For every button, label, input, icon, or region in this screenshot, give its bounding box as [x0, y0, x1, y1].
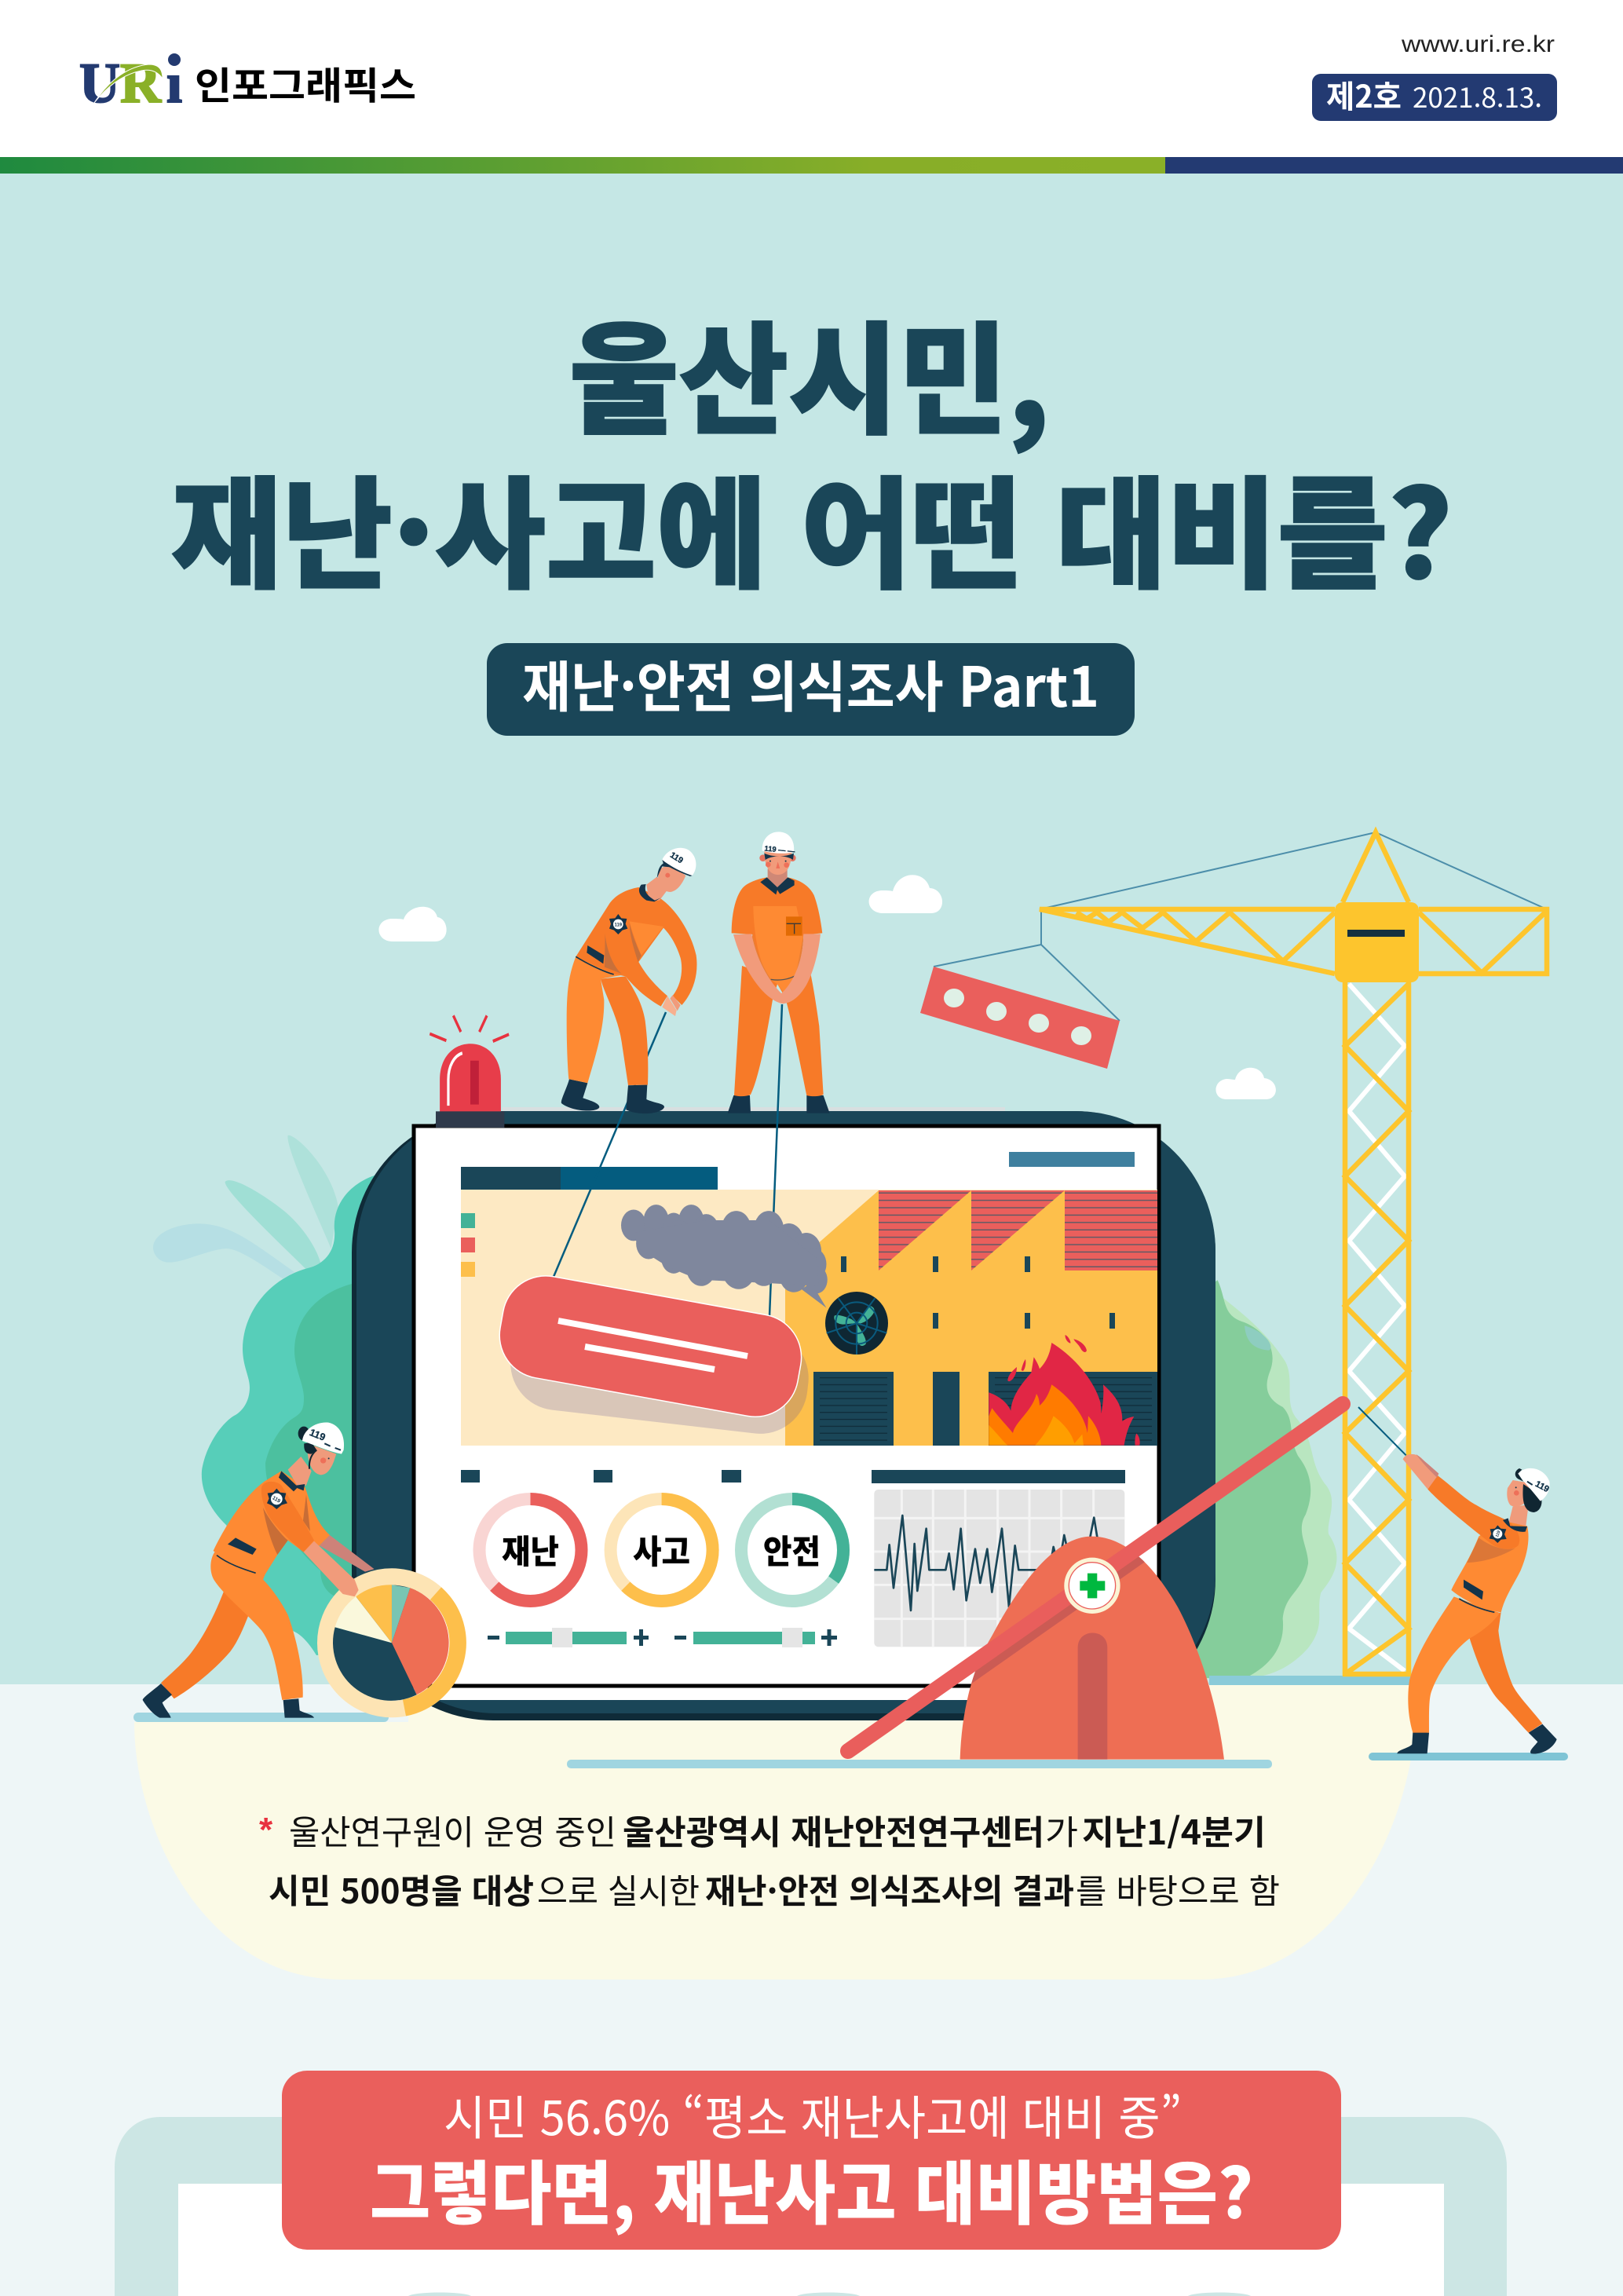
left bush: [202, 1175, 393, 1655]
pie chart dial: [326, 1577, 458, 1709]
cream ground shape: [134, 1685, 1417, 1980]
section markers: [461, 1470, 1125, 1483]
header colour bar: [0, 157, 1623, 174]
survey footnote: *: [259, 1811, 273, 1849]
firefighter pulling left: 119: [668, 850, 685, 865]
factory panel: [461, 1190, 1157, 1446]
survey footnote: [259, 1806, 1280, 1914]
survey footnote: 를 바탕으로 함: [1076, 1865, 1280, 1914]
result panel: [115, 2117, 1507, 2296]
ring: accident: 사고: [633, 1526, 690, 1574]
website url: www.uri.re.kr: [1401, 31, 1555, 57]
smoke: [621, 1205, 828, 1308]
firefighter pulling lever: 119: [1533, 1479, 1551, 1494]
fan: [825, 1292, 888, 1355]
hanging steel beam: [920, 967, 1120, 1069]
firefighter turning dial: 119: [308, 1427, 327, 1443]
firefighter pulling lever: [1358, 1407, 1557, 1754]
firefighter turning dial: [143, 1422, 375, 1718]
base bar under gauge: [567, 1760, 1272, 1768]
alarm light: [430, 1015, 509, 1128]
survey footnote: 시민 500명을 대상: [269, 1865, 534, 1914]
left plants: [153, 1135, 338, 1278]
fire: [989, 1335, 1140, 1446]
base bar under left firefighter: [133, 1713, 389, 1722]
tower crane: [934, 832, 1547, 1676]
result callout: [282, 2071, 1341, 2250]
logo: 인포그래픽스: [195, 55, 416, 110]
issue badge: 제2호: [1326, 71, 1402, 117]
subtitle pill: 재난·안전 의식조사 Part1: [522, 644, 1099, 723]
gauge dome with lever: [848, 1404, 1343, 1760]
title: [171, 283, 1453, 613]
firefighter turning dial: 119: [271, 1495, 281, 1504]
crane base bar: [1209, 1676, 1413, 1685]
title: 재난·사고에 어떤 대비를?: [171, 438, 1453, 613]
firefighter pulling centre: [728, 832, 830, 1113]
logo: R: [120, 52, 162, 115]
ring: safety: [741, 1499, 843, 1601]
logo: [79, 52, 416, 115]
firefighter pulling left: 119: [614, 923, 623, 927]
survey footnote: 가: [1045, 1806, 1078, 1855]
rope right: [769, 1004, 782, 1316]
survey footnote: 울산연구원이 운영 중인: [289, 1806, 616, 1855]
clouds: [378, 875, 1276, 1099]
red capsule: [492, 1269, 813, 1439]
base bar under right firefighter: [1369, 1753, 1568, 1760]
ring: safety: 안전: [763, 1526, 821, 1574]
survey footnote: 지난1/4분기: [1082, 1806, 1266, 1855]
sliders: [488, 1628, 837, 1647]
logo: ı: [166, 52, 182, 115]
issue badge: [1312, 71, 1557, 121]
survey footnote: 으로 실시한: [537, 1865, 700, 1914]
tablet body: [352, 1107, 1215, 1720]
survey footnote: 울산광역시 재난안전연구센터: [623, 1806, 1044, 1855]
result callout: 그렇다면, 재난사고 대비방법은?: [370, 2139, 1253, 2239]
firefighter pulling left: [561, 848, 696, 1113]
result callout: 시민 56.6% “평소 재난사고에 대비 중”: [444, 2081, 1182, 2149]
right bush: [1181, 1280, 1336, 1679]
logo: U: [79, 52, 120, 115]
waveform chart: [874, 1490, 1124, 1647]
survey footnote: 재난·안전 의식조사의 결과: [705, 1865, 1074, 1914]
ring: accident: [611, 1499, 713, 1601]
ring: disaster: [479, 1499, 581, 1601]
ring: disaster: 재난: [502, 1526, 559, 1574]
firefighter pulling lever: 119: [1495, 1530, 1502, 1538]
rope left: [554, 1012, 666, 1277]
firefighter pulling centre: 119 — —: [764, 844, 795, 855]
title: 울산시민,: [569, 283, 1050, 459]
issue badge: 2021.8.13.: [1413, 76, 1542, 116]
screen header bars: [461, 1152, 1135, 1190]
